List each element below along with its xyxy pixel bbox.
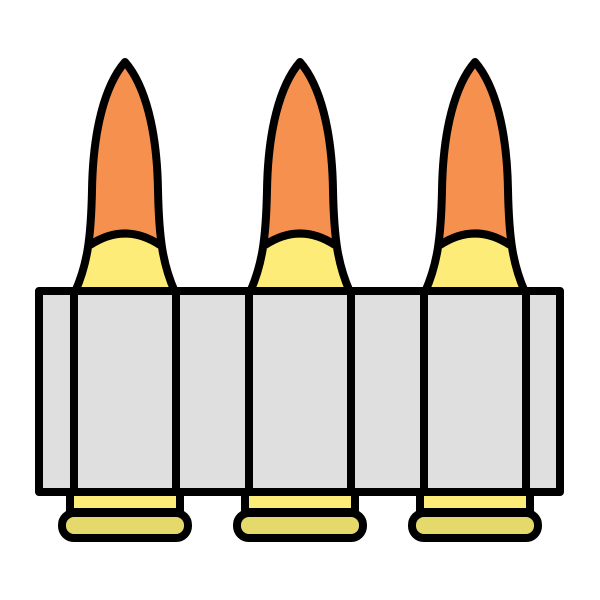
bullet 3 bbox=[412, 62, 538, 538]
bullet 1 bbox=[62, 62, 188, 538]
bullet 2 bbox=[237, 62, 363, 538]
belt bbox=[39, 291, 560, 492]
